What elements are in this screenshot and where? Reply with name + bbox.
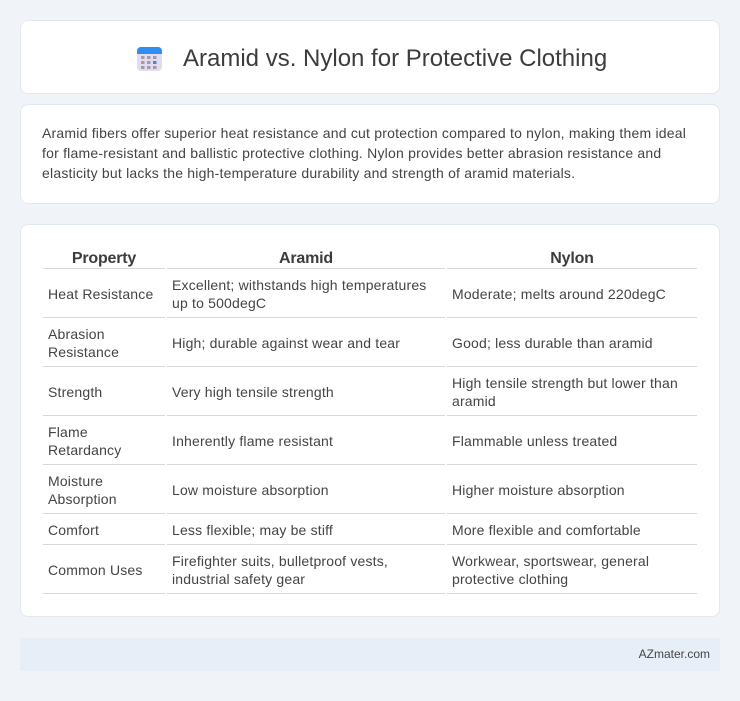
row: Flame Retardancy: Flame [48,424,88,440]
Abrasion Resistance: Nylon: Good; less durable than aramid [452,335,653,351]
row: Abrasion Resistance: Abrasion [48,326,105,342]
Common Uses: Nylon [452,553,649,587]
row: Flame Retardancy: Retardancy [48,442,121,458]
title: Aramid vs. Nylon for Protective Clothing [183,45,607,72]
Heat Resistance: Aramid: Excellent; withstands high temperatures [172,277,426,293]
Strength: Nylon: High tensile strength but lower than [452,375,678,391]
Moisture Absorption: Aramid: Low moisture absorption [172,482,329,498]
summary text: Aramid fibers offer superior heat resistance and cut protection compared to nylon, making them ideal [42,125,686,141]
row: Strength: Strength [48,384,102,400]
row: Moisture Absorption: Absorption [48,491,117,507]
Strength: Aramid: Very high tensile strength [172,384,334,400]
footer credit: AZmater.com [639,647,710,661]
column header: Aramid: Aramid [279,250,333,267]
summary text: for flame-resistant and ballistic protective clothing. Nylon provides better abrasion resistance and [42,145,661,161]
Flame Retardancy: Nylon: Flammable unless treated [452,433,617,449]
row: Abrasion Resistance: Resistance [48,344,119,360]
Moisture Absorption: Nylon: Higher moisture absorption [452,482,625,498]
summary text [42,125,686,181]
row: Comfort: Comfort [48,522,99,538]
Abrasion Resistance: Aramid: High; durable against wear and tear [172,335,400,351]
header panel [20,20,720,94]
row: Heat Resistance: Heat Resistance [48,286,153,302]
comparison table panel [20,224,720,617]
Heat Resistance: Aramid [172,277,426,311]
Strength: Nylon [452,375,678,409]
Strength: Nylon: aramid [452,393,496,409]
summary panel [20,104,720,204]
Common Uses: Nylon: Workwear, sportswear, general [452,553,649,569]
Common Uses: Aramid: Firefighter suits, bulletproof vests, [172,553,388,569]
row: Common Uses: Common Uses [48,562,143,578]
Flame Retardancy: Aramid: Inherently flame resistant [172,433,333,449]
footer bar [20,638,720,671]
Common Uses: Aramid [172,553,388,587]
column header: Property: Property [72,250,136,267]
row: Moisture Absorption: Moisture [48,473,103,489]
Common Uses: Nylon: protective clothing [452,571,568,587]
Comfort: Aramid: Less flexible; may be stiff [172,522,333,538]
Heat Resistance: Aramid: up to 500degC [172,295,266,311]
Comfort: Nylon: More flexible and comfortable [452,522,641,538]
summary text: elasticity but lacks the high-temperature durability and strength of aramid materials. [42,165,575,181]
row: Moisture Absorption [48,473,117,507]
row: Abrasion Resistance [48,326,119,360]
icon: calendar [137,47,162,71]
Common Uses: Aramid: industrial safety gear [172,571,305,587]
Heat Resistance: Nylon: Moderate; melts around 220degC [452,286,666,302]
column header: Nylon: Nylon [550,250,594,267]
row: Flame Retardancy [48,424,122,458]
